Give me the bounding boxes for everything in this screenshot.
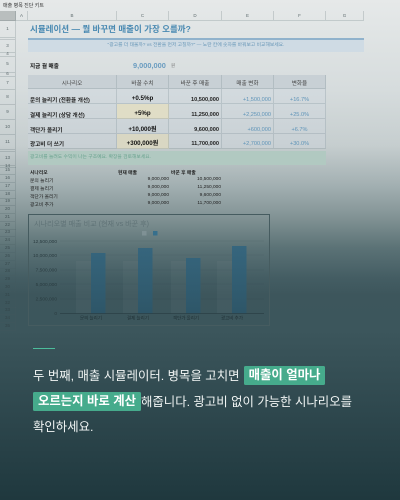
chart data table: 10,500,000	[197, 177, 221, 182]
chart data table: 광고비 추가	[30, 203, 53, 208]
x axis labels: 결제 늘리기	[127, 314, 149, 322]
caption line 1: 두 번째, 매출 시뮬레이터. 병목을 고치면	[33, 369, 240, 383]
highlight: revenue amount	[244, 366, 325, 384]
row headers: 4	[6, 51, 9, 56]
scenario table: 광고비 더 쓰기	[30, 142, 64, 148]
row headers: 28	[5, 268, 10, 273]
column headers: F	[298, 13, 301, 18]
current monthly revenue	[30, 61, 175, 70]
column headers: A	[20, 13, 23, 18]
row headers: 8	[6, 94, 9, 99]
scenario table: +16.7%	[290, 97, 309, 103]
row headers: 20	[5, 206, 10, 211]
row headers: 18	[5, 191, 10, 196]
chart data table: 현재 매출	[118, 171, 137, 176]
row headers: 1	[6, 26, 9, 31]
scenario table: +5%p	[134, 110, 151, 116]
scenario table: 매출 변화	[236, 81, 259, 87]
scenario table: 객단가 올리기	[30, 128, 62, 134]
row headers: 26	[5, 253, 10, 258]
scenario table: +1,500,000	[243, 97, 271, 103]
scenario table: 시나리오	[62, 81, 82, 87]
x axis labels: 객단가 올리기	[173, 314, 199, 322]
y axis labels	[33, 239, 57, 317]
row headers: 11	[5, 139, 10, 144]
row headers: 15	[5, 167, 10, 172]
row headers: 19	[5, 198, 10, 203]
row headers: 23	[5, 229, 10, 234]
column headers: B	[70, 13, 74, 18]
row headers: 5	[6, 61, 9, 66]
row headers: 7	[6, 80, 9, 85]
scenario table: +300,000원	[127, 140, 158, 146]
chart data table: 9,000,000	[148, 201, 169, 206]
y axis labels: 12,500,000	[33, 239, 57, 245]
row headers: 24	[5, 237, 10, 242]
scenario table: 9,600,000	[194, 127, 219, 133]
scenario table: 바꾼 후 매출	[181, 81, 209, 87]
row headers: 14	[5, 163, 10, 168]
row headers: 13	[5, 155, 10, 160]
chart data table: 시나리오	[30, 171, 48, 176]
scenario table: +6.7%	[291, 127, 308, 133]
green note banner: 광고비를 늘려도 수익이 나는 구조예요. 확장을 검토해보세요.	[30, 155, 151, 160]
x axis labels	[80, 314, 243, 322]
scenario table: +2,700,000	[243, 141, 271, 147]
chart title: 시나리오별 매출 비교 (현재 vs 바꾼 후)	[34, 219, 149, 228]
row headers: 17	[5, 183, 10, 188]
green note banner	[28, 151, 326, 165]
chart data table: 9,600,000	[200, 193, 221, 198]
row headers: 29	[5, 276, 10, 281]
row headers: 9	[6, 109, 9, 114]
row headers: 21	[5, 214, 10, 219]
scenario table: 문의 늘리기 (전환율 개선)	[30, 98, 90, 104]
y axis labels: 10,000,000	[33, 253, 57, 259]
current monthly revenue: 9,000,000	[133, 61, 166, 70]
column headers	[0, 11, 364, 21]
row headers: 32	[5, 300, 10, 305]
scenario table: 결제 늘리기 (상담 개선)	[30, 113, 85, 119]
current monthly revenue: 지금 월 매출	[30, 64, 59, 70]
row headers: 34	[5, 315, 10, 320]
highlight: instant calculation	[33, 392, 141, 411]
y axis labels: 5,000,000	[36, 282, 57, 288]
column headers: E	[246, 13, 249, 18]
subtitle banner	[28, 38, 364, 52]
scenario table: 변화율	[292, 81, 307, 87]
scenario table	[28, 75, 326, 148]
y axis labels: 0	[54, 311, 57, 317]
caption line 2: 해줍니다. 광고비 없이 가능한 시나리오를	[141, 395, 352, 409]
row headers: 6	[6, 71, 9, 76]
row headers: 25	[5, 245, 10, 250]
scenario table: +2,250,000	[243, 112, 271, 118]
current monthly revenue: 원	[171, 63, 175, 68]
column headers: C	[141, 13, 144, 18]
row headers: 22	[5, 222, 10, 227]
row headers: 3	[6, 43, 9, 48]
highlight: instant calculation: 오르는지 바로 계산	[38, 394, 136, 408]
chart data table: 결제 늘리기	[30, 187, 53, 192]
chart data table: 9,000,000	[148, 193, 169, 198]
row headers	[0, 21, 16, 328]
chart data table: 바꾼 후 매출	[171, 171, 196, 176]
scenario table: 11,250,000	[191, 112, 219, 118]
chart data table: 11,700,000	[197, 201, 221, 206]
row headers: 33	[5, 307, 10, 312]
x axis labels: 문의 늘리기	[80, 314, 102, 322]
window title: 매출 병목 진단 키트	[3, 3, 44, 9]
chart data table: 9,000,000	[148, 177, 169, 182]
chart data table: 객단가 올리기	[30, 195, 58, 200]
accent line	[33, 348, 55, 349]
bar chart: revenue by scenario	[28, 214, 270, 326]
current revenue bars	[76, 261, 232, 314]
column headers: G	[343, 13, 346, 18]
scenario table: 11,700,000	[191, 141, 219, 147]
scenario table: +30.0%	[290, 141, 309, 147]
legend	[142, 231, 158, 236]
row headers: 35	[5, 323, 10, 328]
scenario table: +0.5%p	[132, 94, 153, 102]
row headers: 31	[5, 292, 10, 297]
revenue after change bars	[91, 246, 246, 314]
scenario table: +600,000	[248, 127, 271, 133]
y axis labels: 7,500,000	[36, 268, 57, 274]
scenario table: +25.0%	[290, 112, 309, 118]
scenario table: 10,500,000	[191, 97, 219, 103]
x axis labels: 광고비 추가	[221, 314, 243, 322]
row headers: 10	[5, 124, 10, 129]
highlight: revenue amount: 매출이 얼마나	[249, 368, 320, 382]
scenario table: 바꿀 수치	[131, 81, 154, 87]
chart data table	[30, 170, 221, 208]
row headers: 16	[5, 175, 10, 180]
chart data table: 문의 늘리기	[30, 179, 53, 184]
chart data table: 11,250,000	[197, 185, 221, 190]
row headers: 30	[5, 284, 10, 289]
column headers: D	[193, 13, 197, 18]
subtitle banner: "광고를 더 태울까? vs 전환을 먼저 고칠까?" — 노란 칸에 숫자를 바꿔보고 비교해보세요.	[108, 43, 284, 48]
caption text	[33, 366, 352, 434]
sheet title: 시뮬레이션 — 뭘 바꾸면 매출이 가장 오를까?	[30, 24, 191, 34]
chart data table: 9,000,000	[148, 185, 169, 190]
scenario table: +10,000원	[128, 126, 157, 132]
caption line 3: 확인하세요.	[33, 420, 93, 434]
y axis labels: 2,500,000	[36, 296, 57, 302]
row headers: 27	[5, 261, 10, 266]
